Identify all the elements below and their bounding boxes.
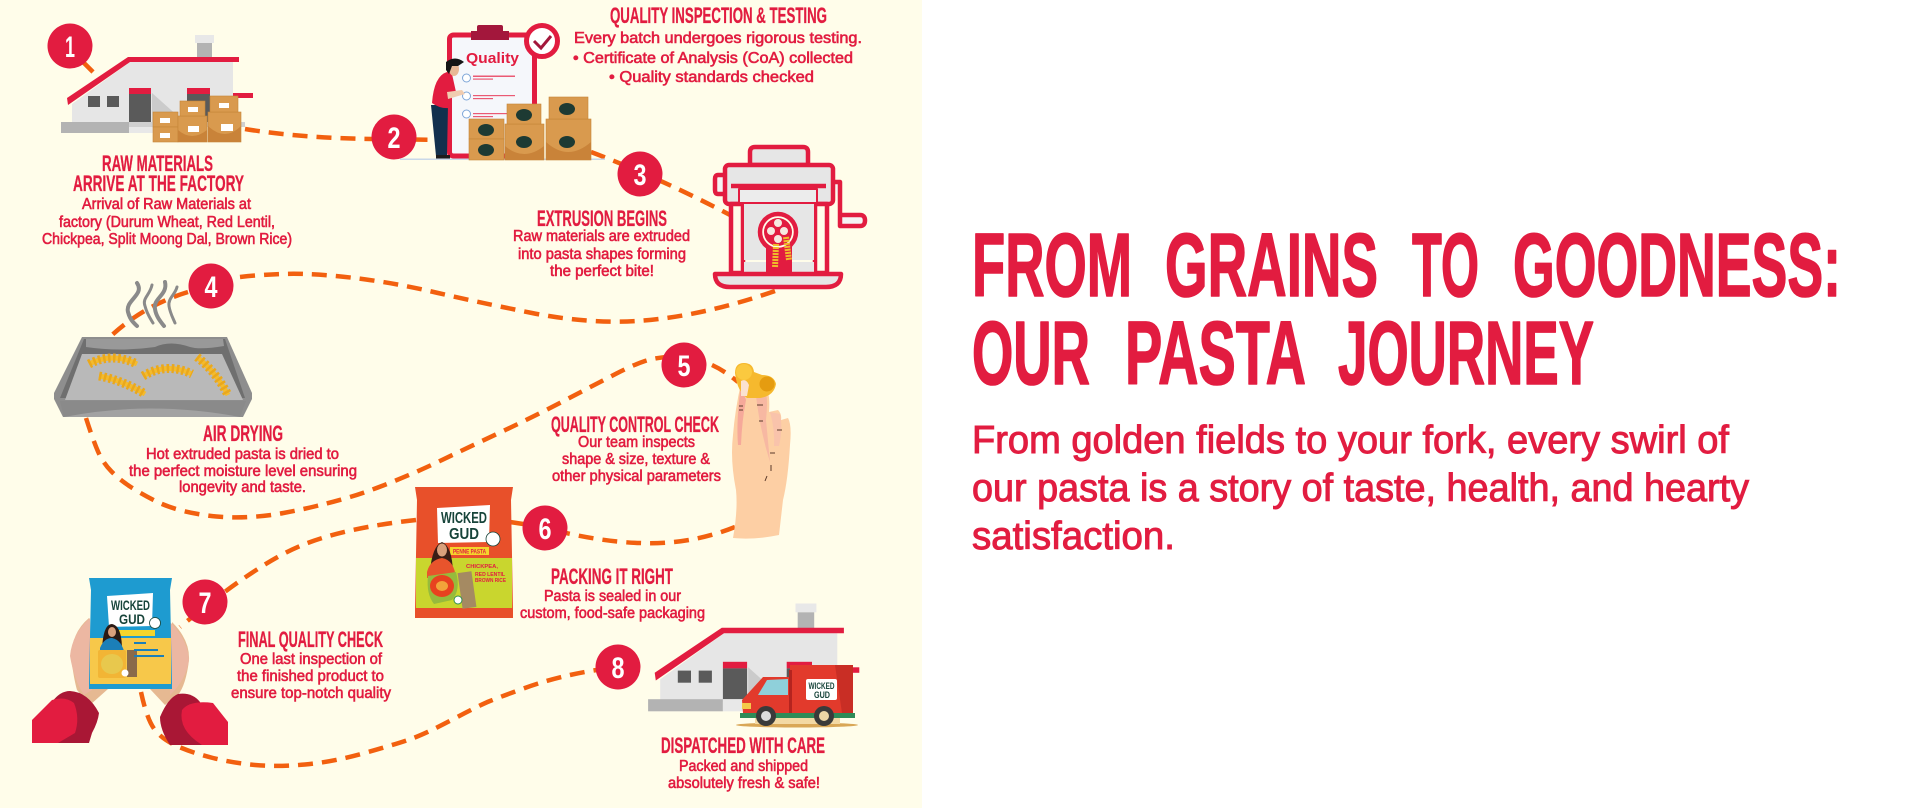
text: raw materials: Arrival of Raw Materials at <box>82 196 252 213</box>
text: extrusion begins: Raw materials are extruded <box>513 228 690 245</box>
text: raw materials: ARRIVE AT THE FACTORY <box>73 171 244 196</box>
title: JOURNEY <box>1338 304 1594 404</box>
icon: delivery truck: GUD <box>814 690 830 700</box>
icon: dispatch factory <box>648 604 859 711</box>
inspector figure <box>431 58 465 158</box>
intro paragraph: satisfaction. <box>972 515 1175 558</box>
icon: penne pasta pack: RED LENTIL <box>475 572 505 578</box>
text: packing it right: custom, food-safe packaging <box>520 605 705 622</box>
title: FROM <box>972 216 1132 316</box>
icon: penne pasta pack: BROWN RICE <box>475 578 507 584</box>
step 6 badge <box>522 506 568 550</box>
text: quality control check <box>551 412 721 485</box>
boxes <box>153 96 241 142</box>
icon: steam <box>128 282 177 326</box>
text: quality control check: shape & size, texture & <box>562 451 711 468</box>
text: extrusion begins: EXTRUSION BEGINS <box>537 206 667 231</box>
icon: penne pasta pack: CHICKPEA, <box>466 564 499 570</box>
step 6 badge: 6 <box>538 513 552 546</box>
icon: delivery truck: WICKED <box>808 681 835 691</box>
step 3 badge: 3 <box>634 159 646 192</box>
text: quality inspection <box>573 3 862 86</box>
clipboard boxes <box>469 97 591 160</box>
text: air drying: Hot extruded pasta is dried to <box>146 446 339 463</box>
cream panel background <box>0 0 922 808</box>
icon: penne pasta pack <box>415 487 513 618</box>
step 4 badge <box>188 264 234 308</box>
text: quality inspection: • Quality standards checked <box>609 69 814 86</box>
text: raw materials: factory (Durum Wheat, Red Lentil, <box>59 214 275 231</box>
text: quality control check: Our team inspects <box>578 434 695 451</box>
step 4 badge: 4 <box>204 271 218 304</box>
icon: penne pasta pack: GUD <box>449 526 479 543</box>
intro paragraph: From golden fields to your fork, every swirl of <box>972 419 1729 462</box>
icon: drying tray with pasta <box>54 337 252 417</box>
text: air drying <box>129 421 357 496</box>
step 7 badge <box>182 580 228 624</box>
text: extrusion begins <box>513 206 690 280</box>
text: dispatched with care <box>661 733 825 792</box>
step 8 badge <box>596 644 640 690</box>
step 2 badge: 2 <box>388 122 400 155</box>
step 1 badge <box>48 24 92 68</box>
text: packing it right <box>520 564 705 622</box>
text: final quality check <box>231 627 391 702</box>
icon: quality clipboard with inspector and boxes: Quality <box>466 50 520 67</box>
text: air drying: the perfect moisture level ensuring <box>129 463 357 480</box>
text: packing it right: Pasta is sealed in our <box>544 588 681 605</box>
title: OUR <box>972 304 1090 404</box>
icon: penne pasta pack: WICKED <box>441 510 487 527</box>
text: extrusion begins: into pasta shapes forming <box>518 246 686 263</box>
text: final quality check: the finished product to <box>237 668 384 685</box>
title <box>972 216 1841 404</box>
intro paragraph: our pasta is a story of taste, health, and hearty <box>972 467 1749 510</box>
icon: hand holding pasta <box>732 363 791 539</box>
text: quality inspection: QUALITY INSPECTION & TESTING <box>610 3 827 28</box>
step 3 badge <box>618 152 662 196</box>
text: final quality check: One last inspection of <box>240 651 383 668</box>
icon: quality clipboard with inspector and boxes <box>400 25 605 160</box>
icon: factory with boxes <box>61 35 253 142</box>
text: air drying: AIR DRYING <box>203 421 283 446</box>
text: extrusion begins: the perfect bite! <box>550 263 654 280</box>
text: final quality check: FINAL QUALITY CHECK <box>238 627 383 652</box>
text: dispatched with care: DISPATCHED WITH CARE <box>661 733 825 758</box>
text: quality inspection: • Certificate of Analysis (CoA) collected <box>573 50 853 67</box>
icon: hands holding macaroni pack: WICKED <box>111 597 150 613</box>
step 1 badge: 1 <box>65 31 75 64</box>
icon: hands holding macaroni pack: GUD <box>119 611 145 627</box>
intro paragraph <box>972 419 1749 558</box>
text: quality inspection: Every batch undergoes rigorous testing. <box>574 30 862 47</box>
step 2 badge <box>372 114 416 160</box>
step 7 badge: 7 <box>198 587 212 620</box>
title: GRAINS <box>1165 216 1378 316</box>
text: raw materials: Chickpea, Split Moong Dal, Brown Rice) <box>42 231 292 248</box>
text: final quality check: ensure top-notch quality <box>231 685 391 702</box>
icon: delivery truck <box>736 665 858 728</box>
step 8 badge: 8 <box>612 652 624 685</box>
step 5 badge <box>662 342 706 388</box>
text: air drying: longevity and taste. <box>179 479 306 496</box>
text: raw materials <box>42 151 292 248</box>
icon: hands holding macaroni pack <box>32 578 228 745</box>
text: packing it right: PACKING IT RIGHT <box>551 564 673 589</box>
text: quality control check: other physical parameters <box>552 468 721 485</box>
text: quality control check: QUALITY CONTROL CHECK <box>551 412 719 437</box>
icon: penne pasta pack: PENNE PASTA <box>453 550 487 556</box>
text: raw materials: RAW MATERIALS <box>102 151 213 176</box>
title: PASTA <box>1125 304 1306 404</box>
icon: pasta extruder <box>715 147 865 287</box>
text: dispatched with care: absolutely fresh & safe! <box>668 775 820 792</box>
dashed journey path <box>83 62 775 766</box>
step 5 badge: 5 <box>678 350 690 383</box>
title: TO <box>1412 216 1479 316</box>
text: dispatched with care: Packed and shipped <box>679 758 808 775</box>
